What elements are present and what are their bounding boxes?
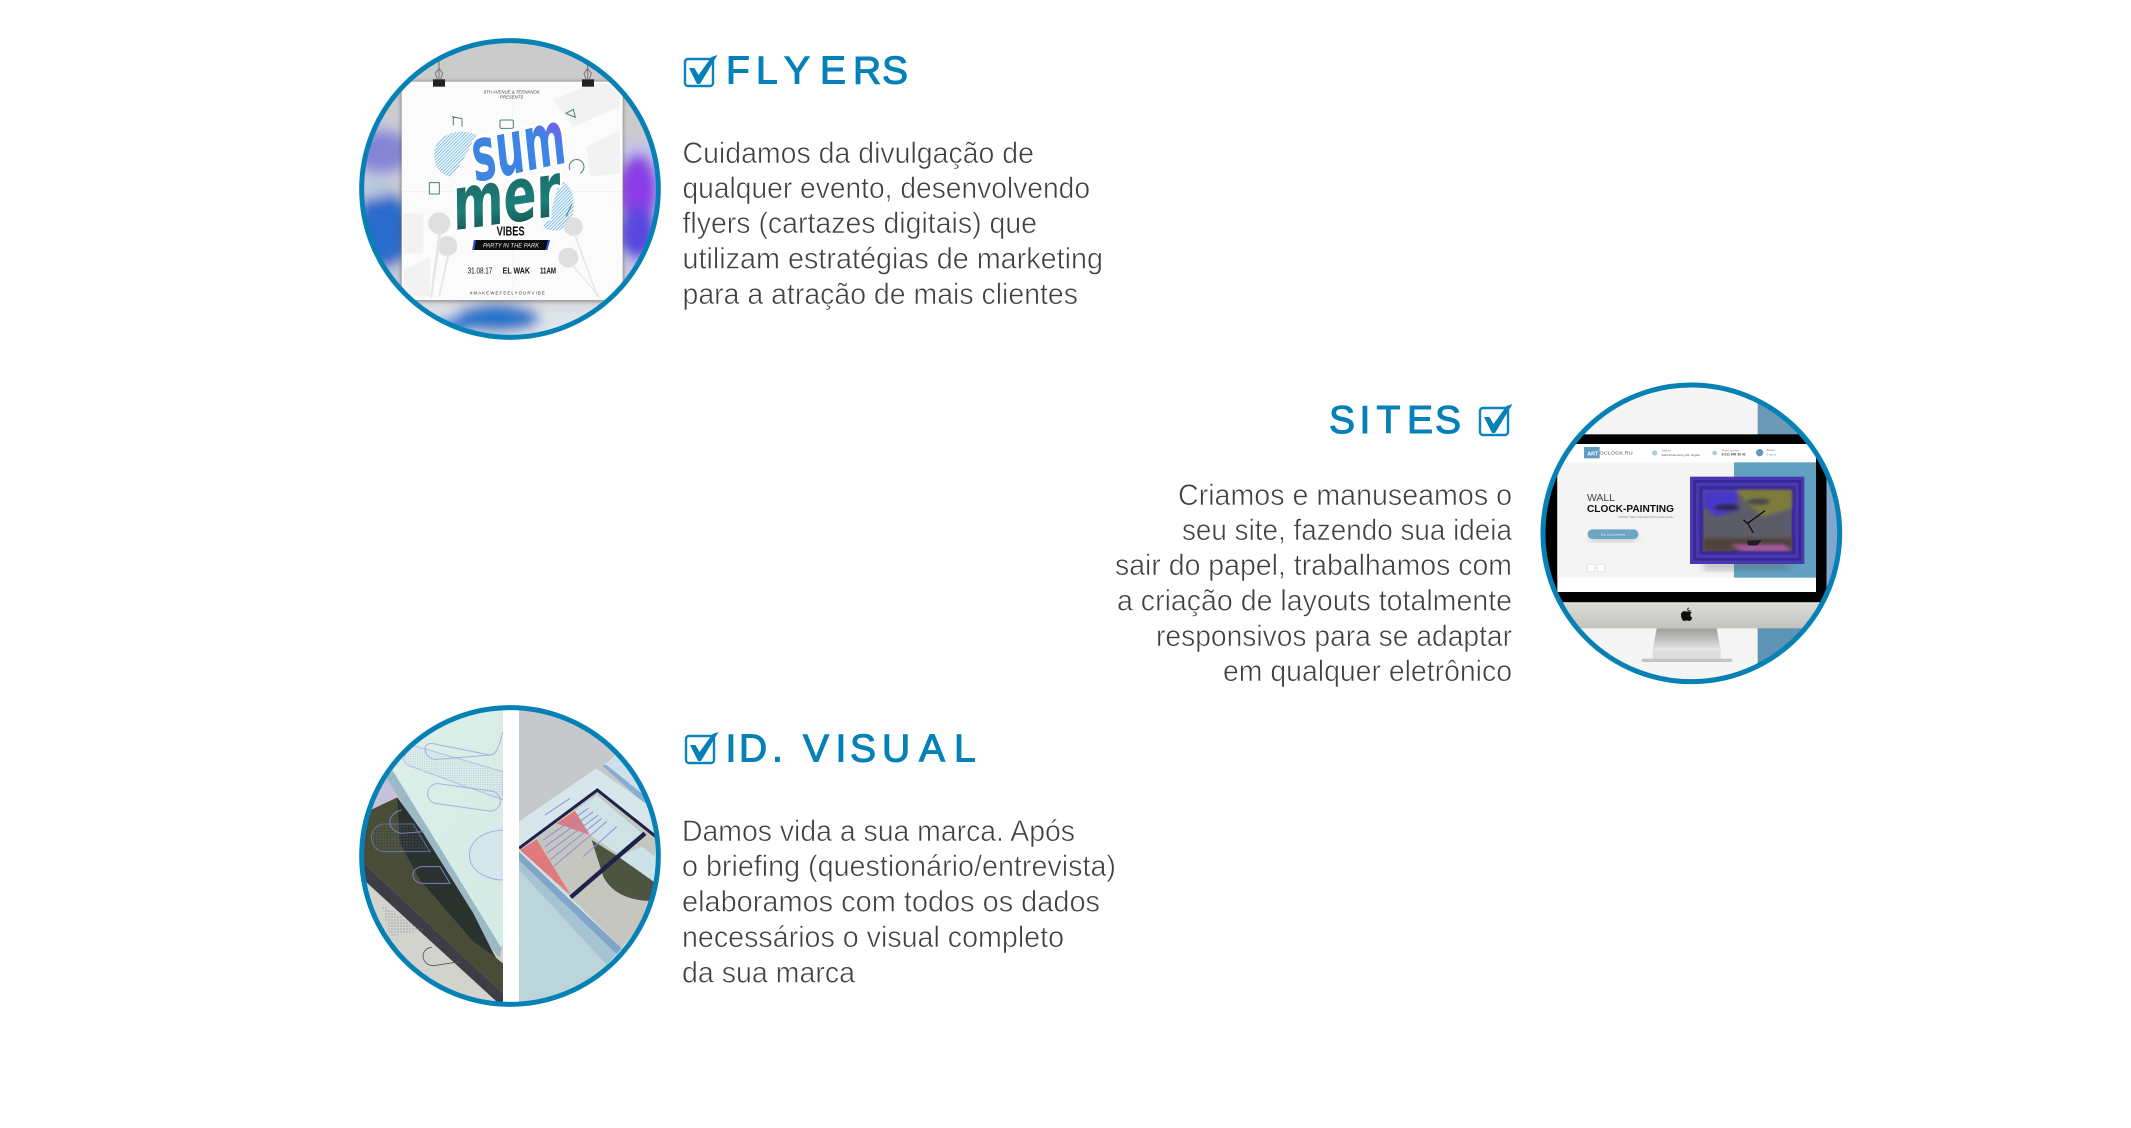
painting canvas <box>1703 490 1792 551</box>
text: flyers description: utilizam estratégias de marketing <box>682 242 1103 276</box>
ring: sites <box>1543 385 1840 682</box>
monitor bezel <box>1540 434 1827 602</box>
site headline: WALL <box>1587 493 1616 504</box>
lavender corner <box>372 778 397 809</box>
monitor stand <box>1642 628 1732 662</box>
poster hatched blobs <box>434 132 574 231</box>
poster details: EL WAK <box>503 265 531 275</box>
icon: checkbox id visual <box>686 732 718 763</box>
white strip <box>503 700 519 1020</box>
text: id visual description: da sua marca <box>682 956 855 990</box>
painting frame <box>1690 477 1804 564</box>
front card <box>519 768 662 1010</box>
site hero background <box>1557 462 1734 578</box>
poster details: 31.08.17 <box>468 265 492 275</box>
ring: flyers <box>362 41 658 337</box>
text: sites description: sair do papel, trabalhamos com <box>1115 549 1512 582</box>
site headline <box>1587 493 1674 519</box>
folder shadow <box>397 797 495 957</box>
card side band <box>519 852 622 965</box>
lower paper <box>357 877 493 1007</box>
monitor chin <box>1562 602 1820 628</box>
text: sites description: a criação de layouts totalmente <box>1117 584 1512 618</box>
text: flyers description: flyers (cartazes digitais) que <box>682 207 1037 240</box>
mint box patterns <box>403 732 503 880</box>
right photo base <box>519 703 662 1010</box>
site header info: Basket <box>1767 448 1775 452</box>
poster details: 11AM <box>540 265 556 275</box>
text: sites description: responsivos para se adaptar <box>1156 620 1512 653</box>
panel: flyers image <box>352 33 667 347</box>
site button: Buy clock-painting <box>1601 532 1625 536</box>
site header info: Saint-Petersburg, Rd. Angels <box>1661 453 1700 457</box>
site headline: FROM THE COLLECTION «PALACE» <box>1619 515 1674 519</box>
poster clips <box>433 62 594 87</box>
text: id visual description: elaboramos com todos os dados <box>682 886 1100 918</box>
site headline: CLOCK-PAINTING <box>1587 504 1674 515</box>
ring: visual identity <box>362 708 658 1004</box>
icon: checkbox sites <box>1480 404 1512 435</box>
poster faint shapes <box>402 82 623 300</box>
text: flyers description: Cuidamos da divulgação de <box>682 137 1034 170</box>
site header info <box>1652 449 1776 456</box>
lower paper patterns <box>382 905 460 966</box>
window olive shape <box>592 840 655 901</box>
site button <box>1588 529 1638 541</box>
text: sites description: em qualquer eletrônico <box>1223 655 1512 688</box>
poster shadow <box>400 81 624 302</box>
text: id visual description: necessários o visual completo <box>682 921 1064 954</box>
window frame <box>519 790 657 897</box>
text: flyers description: para a atração de mais clientes <box>682 278 1078 311</box>
poster banner <box>472 240 550 250</box>
panel: sites image <box>1540 380 1844 683</box>
poster details <box>468 268 556 294</box>
back card <box>603 755 662 820</box>
folder edge <box>357 857 503 1002</box>
poster doodles <box>429 109 584 217</box>
poster title: sum: sum <box>462 93 573 199</box>
text: id visual description: Damos vida a sua marca. Após <box>682 815 1075 848</box>
text: flyers description <box>682 137 1103 311</box>
text: id visual description <box>682 815 1116 990</box>
poster header text: 8TH AVENUE & TEENKNOK <box>484 89 541 94</box>
heading: sites: SITES <box>1329 399 1461 442</box>
card lower face <box>519 870 607 1010</box>
panel: visual identity image <box>357 700 662 1020</box>
folder patterns <box>371 810 450 883</box>
heading: id visual: ID. VISUAL <box>726 728 976 770</box>
window red shape <box>520 839 571 895</box>
text: sites description <box>1115 479 1512 688</box>
site logo <box>1584 447 1633 458</box>
site logo: ART <box>1587 451 1599 457</box>
poster subtitle: VIBES <box>497 225 525 239</box>
window light shape <box>575 795 642 853</box>
site logo: OCLOCK.RU <box>1599 451 1633 457</box>
poster details: #MAKEWEFEELYOURVIBE <box>470 291 546 296</box>
flyer background colour blobs <box>364 122 656 335</box>
left photo base <box>364 770 503 1002</box>
site header info: Address <box>1661 448 1672 452</box>
panel: flyers image: PRESENTS <box>500 95 523 100</box>
site header info: Phone number <box>1722 448 1739 452</box>
site header info: 0 items <box>1767 452 1777 456</box>
monitor screen <box>1557 444 1816 592</box>
text: sites description: seu site, fazendo sua ideia <box>1182 514 1512 547</box>
icon: checkbox flyers <box>685 55 718 86</box>
poster title: mer: mer <box>446 145 568 248</box>
icon: apple logo <box>1681 607 1692 621</box>
text: flyers description: qualquer evento, desenvolvendo <box>682 172 1090 205</box>
backdrop blue blocks <box>1758 404 1798 434</box>
text: sites description: Criamos e manuseamos o <box>1178 479 1512 512</box>
mint box top <box>392 710 503 946</box>
heading: flyers: FLYERS <box>726 50 908 92</box>
poster sheet <box>402 82 623 300</box>
site header info: 8 911 846 38 43 <box>1722 453 1746 457</box>
painting shadow <box>1703 562 1790 570</box>
mint box side <box>385 772 502 958</box>
window base <box>520 791 655 948</box>
site slider arrows <box>1588 565 1604 572</box>
text lines in window <box>543 798 617 867</box>
text: id visual description: o briefing (questionário/entrevista) <box>682 850 1116 883</box>
poster banner: PARTY IN THE PARK <box>483 242 539 249</box>
poster palm trees <box>428 212 601 298</box>
olive folder <box>357 797 503 993</box>
site hero blue block <box>1734 462 1816 578</box>
